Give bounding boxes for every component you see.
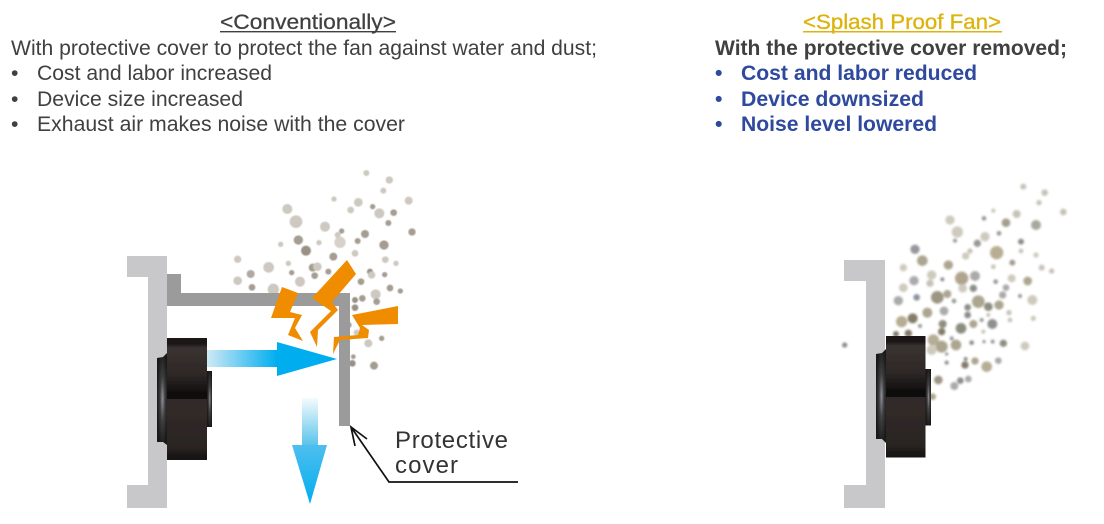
bullet list: benefits: Noise level lowered: [741, 113, 937, 136]
label: protective cover: [395, 427, 508, 479]
protective cover: [167, 274, 350, 426]
bullet list: benefits: •: [715, 113, 722, 136]
leader line to cover: [351, 427, 518, 482]
bullet list: benefits: [715, 62, 977, 136]
bullet list: drawbacks: [11, 62, 405, 136]
bullet list: drawbacks: Device size increased: [37, 88, 243, 111]
diagram: splash proof fan without cover: [842, 184, 1067, 508]
bullet list: drawbacks: •: [11, 62, 18, 85]
text block: splash proof fan: [715, 11, 1067, 136]
bullet list: drawbacks: •: [11, 88, 18, 111]
bullet list: benefits: •: [715, 62, 722, 85]
intro sentence: With protective cover to protect the fan against water and dust;: [11, 37, 597, 60]
bullet list: drawbacks: Cost and labor increased: [37, 62, 272, 85]
airflow arrow: downward: [292, 398, 327, 504]
heading: Conventionally: <Conventionally>: [220, 11, 396, 34]
intro sentence: With the protective cover removed;: [715, 37, 1067, 60]
heading: Splash Proof Fan: <Splash Proof Fan>: [803, 11, 1001, 34]
water and dust particles: [842, 184, 1067, 400]
bullet list: benefits: Device downsized: [741, 88, 924, 111]
bullet list: drawbacks: Exhaust air makes noise with the cover: [37, 113, 405, 136]
bullet list: benefits: Cost and labor reduced: [741, 62, 977, 85]
label: protective cover: cover: [395, 452, 458, 479]
bullet list: drawbacks: •: [11, 113, 18, 136]
lightning bolts: noise: [271, 260, 398, 354]
fan mounting bracket: [844, 260, 885, 508]
fan mounting bracket: [127, 256, 167, 508]
diagram: conventional fan with cover: [127, 170, 518, 508]
fan: [876, 336, 931, 458]
water and dust particles: [233, 170, 416, 370]
label: protective cover: Protective: [395, 427, 508, 454]
airflow arrow: horizontal: [207, 342, 337, 376]
text block: conventional approach: [11, 11, 597, 136]
bullet list: benefits: •: [715, 88, 722, 111]
fan: [157, 338, 212, 460]
